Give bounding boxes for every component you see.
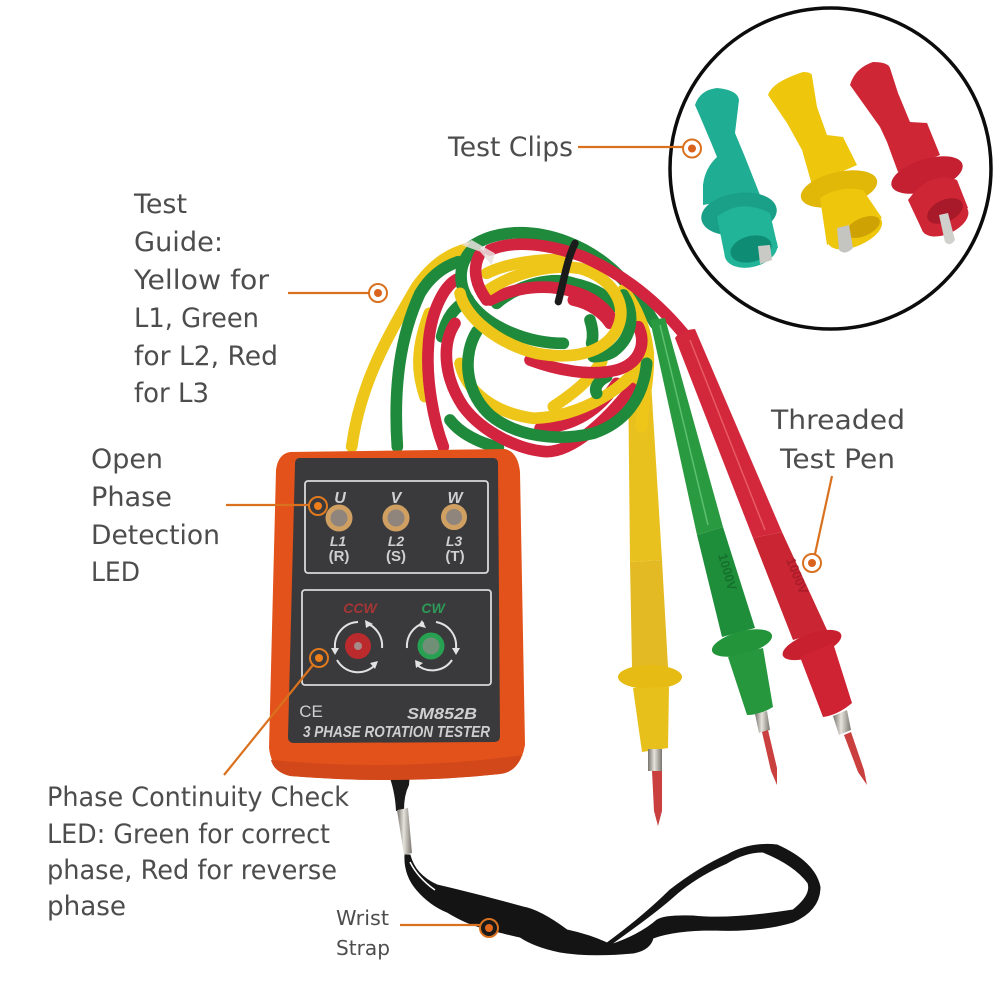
test pen: green xyxy=(650,318,777,785)
callout: test guide: Yellow for xyxy=(133,265,270,296)
callout: open phase detection LED xyxy=(91,444,327,588)
device: phase rotation tester xyxy=(269,449,525,780)
wire bundle xyxy=(352,233,683,452)
panel: LED indicators: L3 xyxy=(446,533,462,549)
callout: phase continuity check LED: phase xyxy=(47,891,126,922)
callout: test guide: for L2, Red xyxy=(134,341,278,372)
panel: LED indicators: V xyxy=(391,490,403,507)
callout: phase continuity check LED: LED: Green for correct xyxy=(47,819,330,850)
callout: phase continuity check LED xyxy=(47,649,349,922)
icon: yellow test clip xyxy=(768,72,887,257)
panel: LED indicators xyxy=(305,481,488,573)
callout: open phase detection LED: LED xyxy=(91,557,140,588)
icon: red test clip xyxy=(850,62,974,244)
panel: LED indicators: (R) xyxy=(329,548,349,565)
device faceplate xyxy=(288,458,500,743)
callout: open phase detection LED: Open xyxy=(91,444,163,475)
panel: rotation indicators: CCW xyxy=(343,600,379,616)
callout: test clips: Test Clips xyxy=(447,132,573,163)
callout: threaded test pen: Test Pen xyxy=(779,444,895,475)
callout: wrist strap xyxy=(336,906,498,960)
callout: open phase detection LED: Detection xyxy=(91,520,220,551)
text: CE mark: CE xyxy=(299,702,323,721)
panel: LED indicators: (S) xyxy=(386,548,406,565)
callout: threaded test pen: Threaded xyxy=(770,405,905,436)
callout: test guide: Guide: xyxy=(134,227,223,258)
callout: open phase detection LED: Phase xyxy=(91,482,172,513)
callout: test guide: L1, Green xyxy=(134,303,259,334)
callout: wrist strap: Strap xyxy=(336,936,390,960)
panel: LED indicators: U xyxy=(334,490,346,507)
callout: test clips xyxy=(447,132,701,163)
test pen: red xyxy=(675,329,867,785)
panel: LED indicators: W xyxy=(447,490,464,507)
callout: threaded test pen xyxy=(770,405,905,572)
callout: test guide: Test xyxy=(133,189,187,220)
panel: rotation indicators xyxy=(302,590,491,685)
test pen: green: 1000V xyxy=(715,552,740,592)
panel: rotation indicators: CW xyxy=(421,600,446,616)
callout: test guide: for L3 xyxy=(134,378,209,409)
inset: test clips circle xyxy=(670,8,991,329)
panel: LED indicators: L1 xyxy=(330,533,346,549)
test pen: yellow xyxy=(618,365,682,826)
callout: phase continuity check LED: phase, Red for reverse xyxy=(47,855,337,886)
callout: test guide xyxy=(133,189,387,409)
callout: wrist strap: Wrist xyxy=(336,906,389,930)
text: model number: SM852B xyxy=(407,706,477,723)
test pen: red: 1000V xyxy=(783,556,811,596)
callout: phase continuity check LED: Phase Continuity Check xyxy=(47,782,349,813)
device body xyxy=(269,449,525,780)
text: product name: 3 PHASE ROTATION TESTER xyxy=(303,724,490,741)
icon: teal test clip xyxy=(695,88,781,273)
panel: LED indicators: (T) xyxy=(445,548,465,565)
panel: LED indicators: L2 xyxy=(388,533,404,549)
wrist strap xyxy=(388,772,820,955)
